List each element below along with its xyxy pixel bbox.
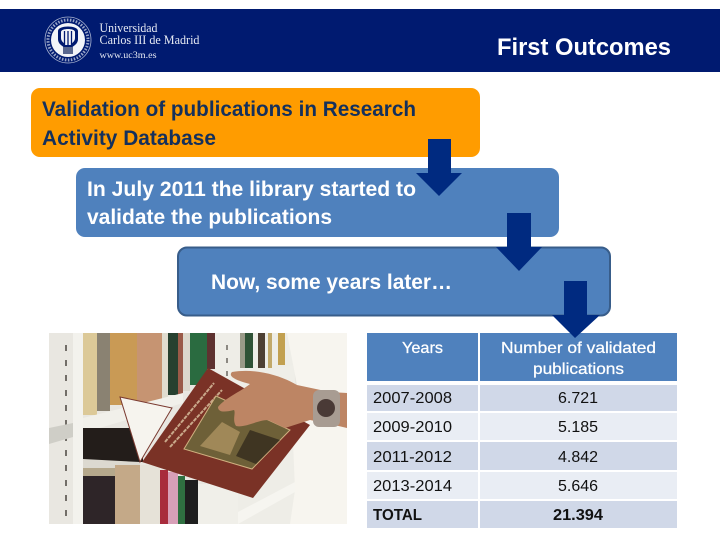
panel: July 2011 box bbox=[76, 168, 559, 237]
row 2011-2012: 4.842 bbox=[558, 449, 598, 466]
row total: 21.394 bbox=[553, 507, 603, 524]
book title lines bbox=[165, 383, 222, 447]
table header: Years bbox=[402, 340, 443, 357]
panel: validation box bbox=[31, 88, 480, 157]
row total: TOTAL bbox=[373, 507, 422, 524]
header band bbox=[0, 9, 720, 72]
book illustration bbox=[184, 396, 290, 469]
table header: Number of validated bbox=[501, 340, 656, 357]
row 2009-2010 bbox=[367, 413, 677, 440]
arrow: years later box to table bbox=[552, 281, 600, 338]
university name: Carlos III de Madrid bbox=[100, 32, 200, 47]
row 2011-2012: 2011-2012 bbox=[373, 449, 452, 466]
row 2011-2012 bbox=[367, 442, 677, 470]
row total bbox=[367, 501, 677, 528]
slide title: First Outcomes bbox=[497, 34, 671, 61]
panel: years later box: Now, some years later… bbox=[211, 270, 452, 294]
books on upper shelf bbox=[83, 333, 285, 415]
panel: validation box: Activity Database bbox=[42, 126, 216, 150]
table bbox=[367, 333, 677, 528]
row 2013-2014: 2013-2014 bbox=[373, 478, 452, 495]
row 2007-2008 bbox=[367, 385, 677, 411]
shelves bbox=[83, 393, 183, 433]
icon: university seal bbox=[45, 17, 91, 63]
lower shelf board bbox=[238, 482, 295, 524]
row 2009-2010: 5.185 bbox=[558, 419, 598, 436]
book pages bbox=[120, 397, 172, 462]
arm and hand bbox=[218, 371, 347, 428]
panel: July 2011 box: In July 2011 the library started to bbox=[87, 177, 416, 201]
row 2013-2014: 5.646 bbox=[558, 478, 598, 495]
left shelf upright bbox=[49, 333, 83, 524]
university name bbox=[100, 20, 200, 60]
row 2007-2008: 2007-2008 bbox=[373, 390, 452, 407]
shirt bbox=[287, 333, 347, 524]
university name: www.uc3m.es bbox=[100, 50, 157, 60]
right shelf background bbox=[215, 333, 295, 524]
watch bbox=[313, 390, 340, 427]
panel: validation box: Validation of publications in Research bbox=[42, 97, 416, 121]
university name: Universidad bbox=[100, 20, 158, 35]
arrow: July box to years later box bbox=[496, 213, 542, 271]
panel: years later box bbox=[178, 248, 610, 316]
row 2013-2014 bbox=[367, 472, 677, 499]
table header bbox=[367, 333, 677, 381]
photo: hand holding book at shelves bbox=[49, 333, 347, 524]
row 2009-2010: 2009-2010 bbox=[373, 419, 452, 436]
books on lower shelf bbox=[83, 428, 238, 524]
book cover bbox=[142, 368, 310, 498]
table header: publications bbox=[533, 361, 624, 378]
arrow: validation to July box bbox=[416, 139, 462, 196]
panel: July 2011 box: validate the publications bbox=[87, 205, 332, 229]
row 2007-2008: 6.721 bbox=[558, 390, 598, 407]
